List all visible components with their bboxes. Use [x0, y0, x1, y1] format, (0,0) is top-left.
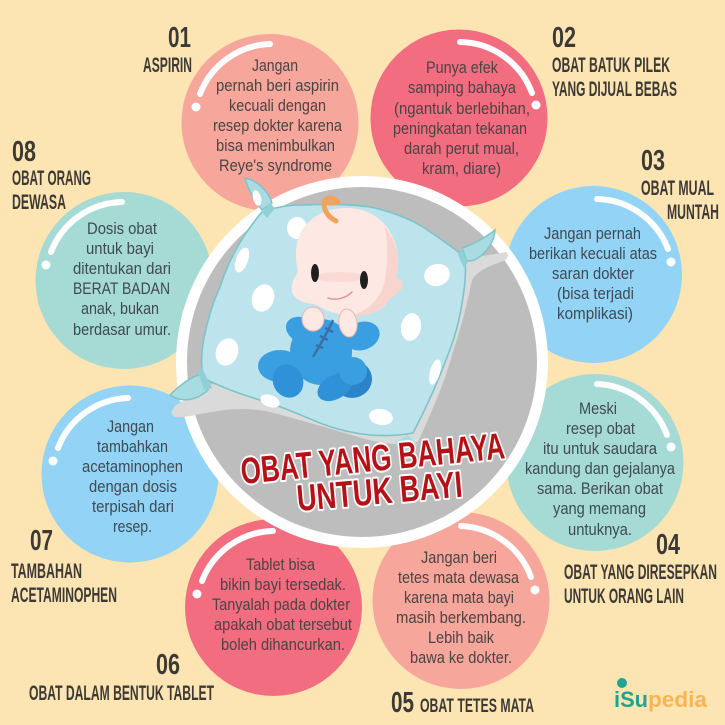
- panel: 04 prescription circle: untuknya.: [568, 521, 632, 539]
- panel: 01 aspirin circle: kecuali dengan: [229, 97, 326, 115]
- heading: 03 nausea medicine: 03: [641, 145, 665, 177]
- heading: 03 nausea medicine: [641, 145, 719, 224]
- heading: 08 adult medicine: OBAT ORANG: [12, 167, 91, 190]
- heading: 08 adult medicine: 08: [12, 136, 36, 168]
- panel: 07 acetaminophen circle: [42, 386, 218, 562]
- panel: 02 cough medicine circle: peningkatan tekanan: [393, 120, 527, 138]
- panel: 01 aspirin circle: resep dokter karena: [213, 117, 343, 135]
- panel: 04 prescription circle: itu untuk saudara: [543, 440, 658, 458]
- panel: 02 cough medicine circle: darah perut mual,: [404, 140, 519, 158]
- heading: 05 eye drops: 05: [391, 687, 414, 719]
- panel: 03 nausea medicine circle: [505, 186, 682, 363]
- panel: 05 eye drops circle: tetes mata dewasa: [398, 569, 520, 587]
- panel: 06 tablet circle: apakah obat tersebut: [214, 616, 352, 634]
- panel: 03 nausea medicine circle: Jangan pernah: [544, 225, 641, 243]
- heading: 05 eye drops: [391, 687, 534, 719]
- panel: 01 aspirin circle: pernah beri aspirin: [216, 77, 339, 95]
- title: UNTUK BAYI: [295, 464, 464, 519]
- logo: iSupedia: [614, 678, 708, 712]
- panel: 05 eye drops circle: [372, 512, 550, 689]
- panel: 02 cough medicine circle: kram, diare): [422, 160, 501, 178]
- heading: 06 tablet: OBAT DALAM BENTUK TABLET: [29, 682, 214, 705]
- panel: 03 nausea medicine circle: saran dokter: [552, 265, 634, 283]
- icon: baby legs and feet: [258, 319, 372, 407]
- panel: 08 adult medicine circle: Dosis obat: [87, 220, 157, 238]
- illustration: pillow: [170, 178, 508, 455]
- panel: 03 nausea medicine circle: komplikasi): [557, 305, 633, 323]
- panel: 07 acetaminophen circle: dengan dosis: [89, 478, 177, 496]
- panel: 07 acetaminophen circle: Jangan: [107, 418, 154, 436]
- heading: 07 acetaminophen: ACETAMINOPHEN: [11, 584, 117, 607]
- logo: iSupedia: pedia: [648, 687, 708, 712]
- panel: 04 prescription circle: sama. Berikan obat: [537, 480, 663, 498]
- panel: 04 prescription circle: kandung dan gejalanya: [525, 460, 676, 478]
- heading: 08 adult medicine: [12, 136, 91, 214]
- panel: 01 aspirin circle: bisa menimbulkan: [216, 137, 335, 155]
- panel: 08 adult medicine circle: ditentukan dari: [73, 260, 171, 278]
- panel: 04 prescription circle: Meski: [579, 400, 617, 418]
- panel: 07 acetaminophen circle: tambahkan: [97, 438, 168, 456]
- heading: 06 tablet: [29, 649, 214, 705]
- panel: 06 tablet circle: Tanyalah pada dokter: [212, 596, 350, 614]
- panel: 02 cough medicine circle: samping bahaya: [408, 79, 517, 97]
- logo: iSupedia: iSu: [614, 687, 648, 712]
- panel: 06 tablet circle: [185, 519, 362, 696]
- icon: baby hands: [302, 307, 359, 338]
- panel: 03 nausea medicine circle: berikan kecuali atas: [529, 245, 657, 263]
- panel: 06 tablet circle: Tablet bisa: [246, 556, 316, 574]
- heading: 07 acetaminophen: 07: [30, 525, 53, 557]
- panel: 05 eye drops circle: Jangan beri: [421, 549, 497, 567]
- heading: 01 aspirin: ASPIRIN: [143, 54, 192, 77]
- panel: 08 adult medicine circle: [36, 192, 212, 369]
- heading: 05 eye drops: OBAT TETES MATA: [420, 696, 534, 717]
- panel: 01 aspirin circle: Jangan: [252, 57, 298, 75]
- panel: 08 adult medicine circle: BERAT BADAN: [73, 280, 170, 298]
- panel: 04 prescription circle: [506, 374, 684, 551]
- panel: 04 prescription circle: yang memang: [553, 500, 646, 518]
- panel: 05 eye drops circle: karena mata bayi: [404, 589, 514, 607]
- panel: 05 eye drops circle: Lebih baik: [428, 629, 495, 647]
- heading: 02 cough medicine: [552, 22, 677, 101]
- panel: 04 prescription circle: resep obat: [566, 420, 635, 438]
- heading: 04 prescription: 04: [656, 529, 680, 561]
- heading: 08 adult medicine: DEWASA: [12, 191, 66, 214]
- heading: 07 acetaminophen: TAMBAHAN: [11, 560, 82, 583]
- panel: 01 aspirin circle: Reye's syndrome: [219, 157, 332, 175]
- panel: 08 adult medicine circle: berdasar umur.: [73, 321, 171, 339]
- heading: 01 aspirin: 01: [168, 22, 191, 54]
- panel: 02 cough medicine circle: Punya efek: [426, 59, 499, 77]
- heading: 01 aspirin: [143, 22, 192, 77]
- panel: 07 acetaminophen circle: acetaminophen: [82, 458, 183, 476]
- panel: 02 cough medicine circle: (ngantuk berlebihan,: [394, 100, 530, 118]
- panel: 02 cough medicine circle: [370, 30, 548, 206]
- panel: 05 eye drops circle: masih berkembang.: [396, 609, 526, 627]
- title: [239, 425, 507, 519]
- panel: 03 nausea medicine circle: (bisa terjadi: [557, 285, 634, 303]
- heading: 04 prescription: [564, 529, 717, 608]
- icon: baby head: [292, 198, 402, 316]
- panel: 08 adult medicine circle: untuk bayi: [86, 240, 154, 258]
- panel: 07 acetaminophen circle: terpisah dari: [92, 498, 174, 516]
- title: OBAT YANG BAHAYA: [239, 425, 507, 492]
- panel: 06 tablet circle: boleh dihancurkan.: [221, 636, 345, 654]
- panel: 05 eye drops circle: bawa ke dokter.: [410, 649, 512, 667]
- illustration: baby: [258, 198, 402, 407]
- heading: 07 acetaminophen: [11, 525, 117, 607]
- panel: 01 aspirin circle: [182, 34, 358, 211]
- heading: 06 tablet: 06: [156, 649, 180, 681]
- panel: 08 adult medicine circle: anak, bukan: [81, 300, 159, 318]
- panel: 07 acetaminophen circle: resep.: [113, 518, 152, 536]
- panel: 06 tablet circle: bikin bayi tersedak.: [220, 576, 346, 594]
- icon: baby arms: [281, 311, 384, 357]
- heading: 02 cough medicine: 02: [552, 22, 576, 54]
- central circle: [176, 176, 548, 548]
